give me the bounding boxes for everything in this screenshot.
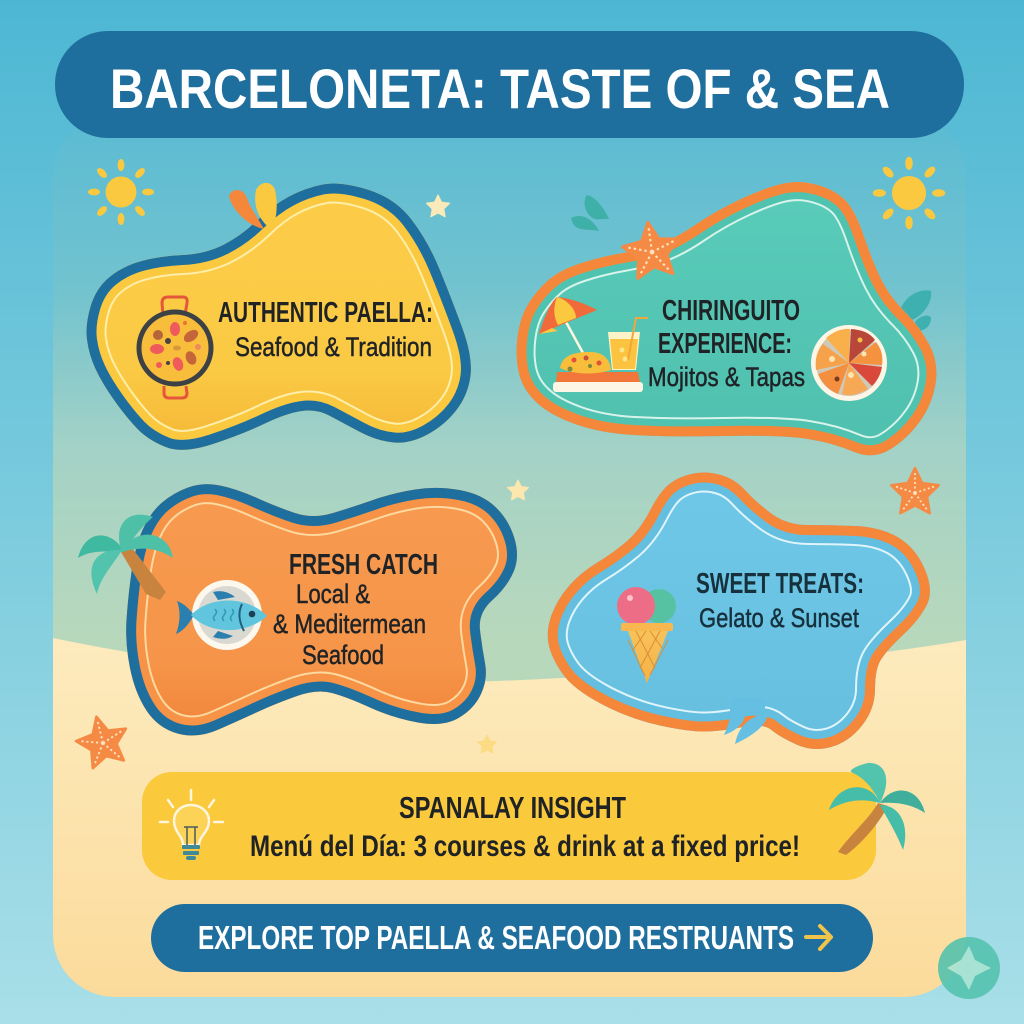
icon: light bulb [160, 790, 223, 860]
icon: feathers [229, 183, 277, 230]
text: fresh catch line 2: & Meditermean [273, 609, 426, 639]
icon: sun left [88, 159, 154, 225]
icon: teal leaves right [900, 290, 931, 331]
icon: corner leaf medallion [938, 937, 1000, 999]
icon: palm tree on callout [829, 763, 925, 855]
callout: insight [142, 772, 876, 880]
button: explore restaurants [151, 904, 873, 972]
text: fresh catch heading: FRESH CATCH [289, 549, 438, 581]
title banner [55, 31, 964, 138]
panel: sweet treats [548, 473, 930, 749]
text: paella heading: AUTHENTIC PAELLA: [218, 297, 433, 329]
panel: fresh catch [78, 484, 517, 736]
title banner: BARCELONETA: TASTE OF & SEA [110, 57, 890, 120]
text: fresh catch line 3: Seafood [302, 640, 384, 670]
beach scene panel [53, 224, 966, 997]
icon: sun right [873, 157, 945, 229]
icon: starfish on border [620, 218, 684, 280]
panel: authentic paella [86, 183, 471, 450]
icon: fish tail splash [724, 698, 768, 744]
icon: fish on plate [176, 580, 267, 650]
icon: arrow [806, 926, 831, 949]
text: sweet treats heading: SWEET TREATS: [696, 568, 864, 600]
icon: starfish bottom left [72, 711, 133, 770]
text: chiringuito heading: CHIRINGUITO [662, 295, 800, 327]
icon: paella pan [139, 297, 211, 398]
icon: starfish right [891, 468, 939, 513]
text: insight body: Menú del Día: 3 courses & drink at a fixed price! [250, 830, 800, 863]
text: insight heading: SPANALAY INSIGHT [399, 790, 626, 825]
icon: drink glass [608, 318, 648, 370]
text: paella subtitle: Seafood & Tradition [235, 332, 432, 362]
icon: ice cream [617, 587, 676, 683]
icon: beach umbrella [539, 297, 597, 353]
text: experience heading: EXPERIENCE: [658, 328, 792, 360]
icon: palm tree [78, 515, 173, 600]
icon: yellow star on sand [478, 735, 496, 753]
icon: cream star [427, 195, 449, 217]
text: button label: EXPLORE TOP PAELLA & SEAFOOD RESTRUANTS [198, 919, 794, 956]
icon: tapas plate [811, 325, 887, 401]
icon: pale star centre [508, 480, 528, 500]
icon: teal splash [571, 195, 609, 231]
text: chiringuito subtitle: Mojitos & Tapas [648, 362, 805, 392]
panel: chiringuito experience [517, 182, 936, 455]
text: fresh catch line 1: Local & [296, 579, 370, 609]
icon: tapas tray [553, 352, 643, 392]
text: sweet treats subtitle: Gelato & Sunset [699, 603, 859, 633]
